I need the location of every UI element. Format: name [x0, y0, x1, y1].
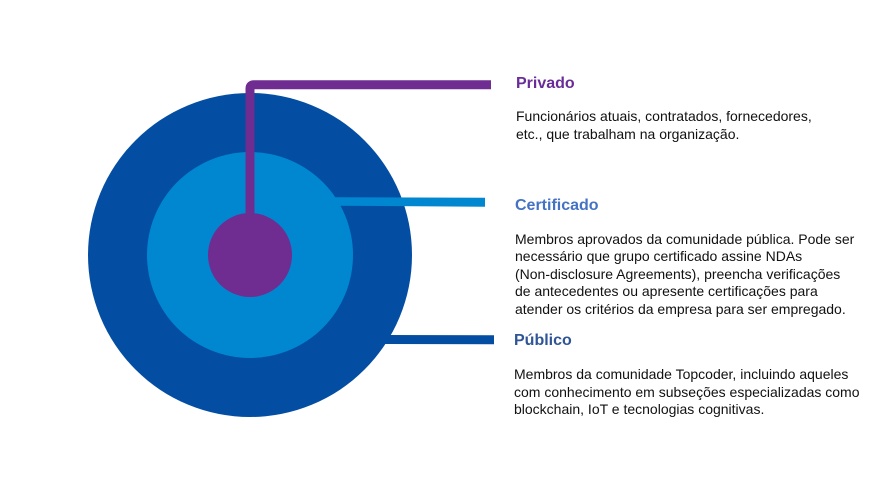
- text: Certificado description: necessário que grupo certificado assine NDAs: [515, 248, 802, 264]
- text: Certificado description: [515, 231, 854, 317]
- text: Público description: Membros da comunidade Topcoder, incluindo aqueles: [514, 366, 848, 382]
- connector: público: [385, 335, 494, 344]
- text: Privado description: [516, 108, 812, 142]
- text: Certificado description: (Non-disclosure Agreements), preencha verificações: [515, 266, 840, 282]
- heading: Privado: Privado: [516, 75, 575, 92]
- text: Público description: com conhecimento em subseções especializadas como: [514, 384, 860, 400]
- text: Público description: blockchain, IoT e tecnologias cognitivas.: [514, 401, 764, 417]
- text: Privado description: etc., que trabalham na organização.: [516, 126, 739, 142]
- text: Público description: [514, 366, 860, 417]
- connector: certificado: [335, 197, 485, 207]
- inner circle: privado: [208, 213, 292, 297]
- text: Certificado description: Membros aprovados da comunidade pública. Pode ser: [515, 231, 854, 247]
- text: Certificado description: de antecedentes ou apresente certificações para: [515, 283, 818, 299]
- middle circle: certificado: [147, 152, 353, 358]
- heading: Certificado: Certificado: [515, 197, 599, 214]
- text: Privado description: Funcionários atuais, contratados, fornecedores,: [516, 108, 812, 124]
- connector: privado: [250, 85, 491, 220]
- outer circle: público: [88, 93, 412, 417]
- text: Certificado description: atender os critérios da empresa para ser empregado.: [515, 301, 846, 317]
- heading: Público: Público: [514, 332, 572, 349]
